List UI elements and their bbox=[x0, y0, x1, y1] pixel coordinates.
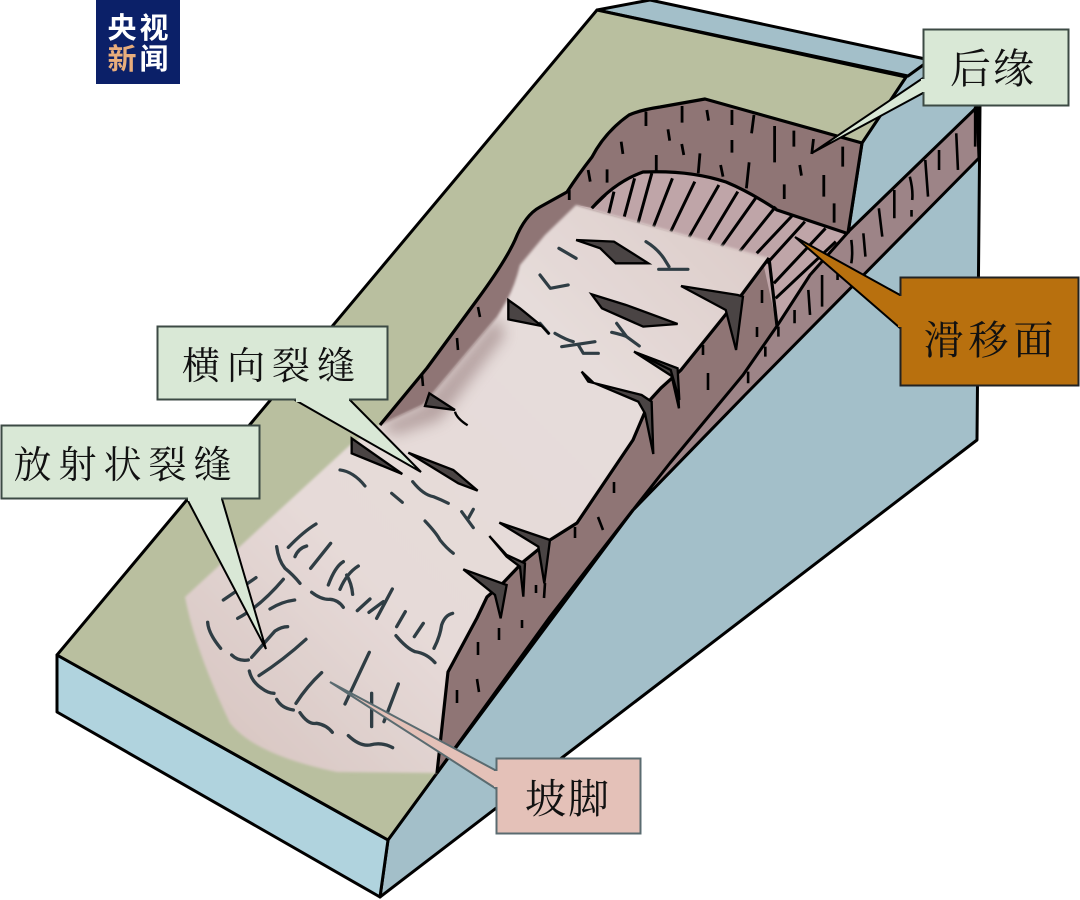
callout: 坡脚: 坡脚 bbox=[525, 776, 611, 822]
callout: 坡脚 bbox=[330, 682, 640, 834]
transverse crack wedges, upper body bbox=[576, 240, 743, 400]
radial cracks at toe bbox=[208, 524, 453, 748]
callout: 横向裂缝 bbox=[158, 326, 421, 472]
logo: CCTV news: 央 bbox=[107, 12, 137, 45]
logo: CCTV news bbox=[96, 0, 180, 84]
slide surface bbox=[576, 172, 846, 326]
logo: CCTV news: 视 bbox=[139, 12, 169, 45]
hatch lines on flank bbox=[422, 290, 762, 703]
callout: 放射状裂缝 bbox=[2, 426, 266, 649]
callout: 后缘: 后缘 bbox=[950, 46, 1036, 92]
top back strip bbox=[597, 0, 930, 76]
callout: 放射状裂缝: 放射状裂缝 bbox=[13, 445, 239, 487]
green ground surface bbox=[57, 10, 906, 840]
body shading at head of step bbox=[380, 317, 505, 435]
outlines of scarp and body edge bbox=[380, 99, 862, 773]
right blue rock face bbox=[380, 60, 980, 897]
brown scarp and flanks bbox=[380, 99, 862, 773]
logo: CCTV news: 闻 bbox=[139, 43, 169, 76]
callout: 横向裂缝: 横向裂缝 bbox=[182, 346, 362, 388]
hatch lines on upper scarp bbox=[569, 106, 843, 223]
callout: 后缘 bbox=[812, 30, 1068, 153]
logo: CCTV news: 新 bbox=[107, 43, 137, 76]
callout: 滑移面 bbox=[795, 237, 1078, 386]
hatching on slide surface bbox=[592, 173, 836, 298]
hatching on rock band bbox=[748, 107, 975, 383]
cracks near body centre bbox=[340, 323, 639, 553]
callout: 滑移面: 滑移面 bbox=[924, 318, 1058, 363]
front light-blue face bbox=[57, 655, 388, 897]
cracks near upper body bbox=[540, 242, 688, 333]
landslide body bbox=[185, 205, 769, 773]
rock band beside slide bbox=[633, 107, 979, 510]
transverse crack wedges, mid body bbox=[352, 300, 679, 618]
